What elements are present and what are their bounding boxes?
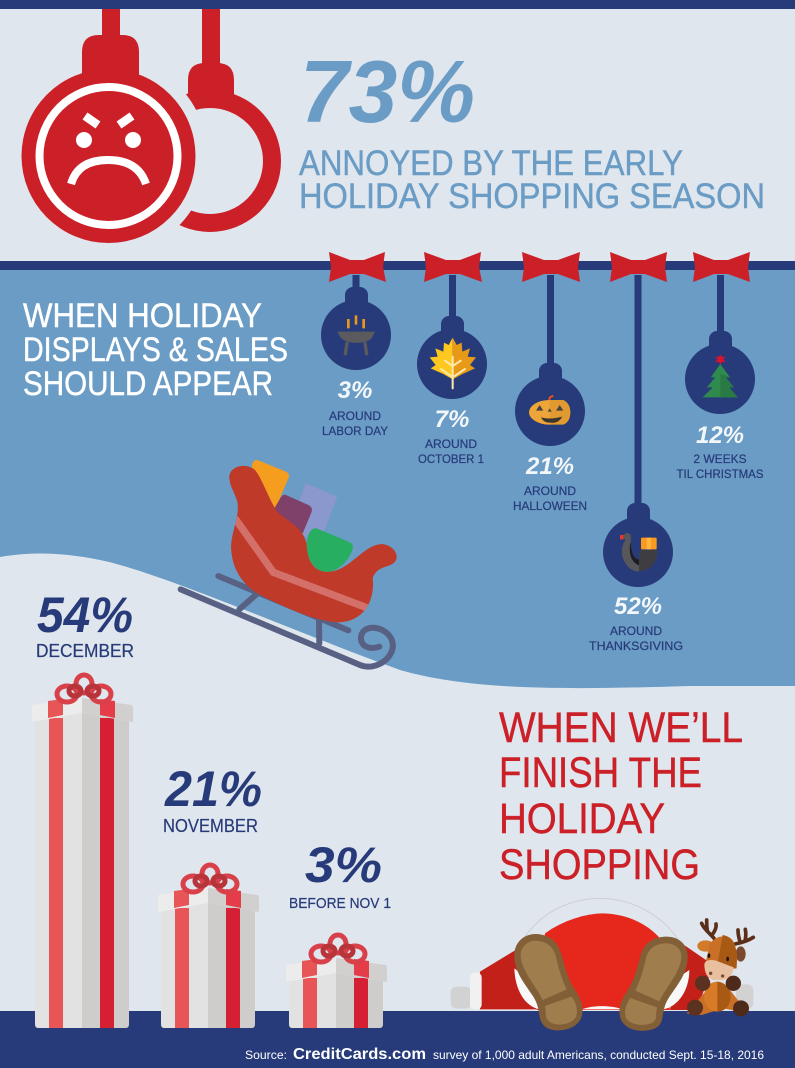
stat: thanksgiving: 52% [614, 593, 662, 620]
section heading: when we'll finish: SHOPPING [499, 841, 700, 889]
section heading: when we'll finish: HOLIDAY [499, 795, 665, 843]
top bar [0, 0, 795, 9]
stat: thanksgiving [589, 593, 683, 653]
gift bar: before nov 1 [286, 935, 387, 1028]
stat: christmas: TIL CHRISTMAS [676, 467, 764, 481]
icon: sleigh [181, 460, 397, 667]
stat: halloween [513, 453, 587, 513]
section heading: when displays should appear: SHOULD APPEAR [23, 365, 273, 403]
stat: december: 54% [37, 587, 133, 643]
ornament: christmas [685, 275, 755, 414]
bottom bar [0, 1011, 795, 1068]
headline text: ANNOYED BY THE EARLY [299, 144, 683, 183]
section heading: when displays should appear: DISPLAYS & SALES [23, 331, 288, 369]
section heading: when we'll finish: FINISH THE [499, 749, 702, 797]
icon: left boot [514, 934, 583, 1030]
stat: labor day: AROUND [329, 409, 381, 423]
stat: labor day [322, 377, 388, 438]
icon: christmas tree [703, 354, 738, 397]
source footer: survey of 1,000 adult Americans, conducted Sept. 15-18, 2016 [433, 1048, 764, 1062]
ornament: thanksgiving [603, 275, 673, 587]
icon: autumn leaf [430, 338, 476, 388]
source footer: Source: [245, 1048, 287, 1062]
gift bar: december [32, 675, 133, 1028]
illustration: santa lying down [451, 898, 753, 1031]
section heading: when displays should appear [23, 297, 288, 403]
headline text: HOLIDAY SHOPPING SEASON [299, 177, 765, 216]
ribbon bows [329, 252, 750, 282]
ornament: labor day [321, 275, 391, 370]
stat: halloween: AROUND [524, 484, 576, 498]
stat: christmas: 12% [696, 422, 744, 449]
source footer [245, 1046, 764, 1063]
stat: october 1: AROUND [425, 437, 477, 451]
stat: october 1: OCTOBER 1 [418, 452, 484, 466]
section heading: when we'll finish: WHEN WE’LL [499, 704, 743, 752]
stat: before nov 1 [289, 837, 391, 912]
stat: thanksgiving: THANKSGIVING [589, 639, 683, 653]
icon: red ring ornament [10, 9, 272, 255]
stat: october 1 [418, 406, 484, 466]
divider rail [0, 261, 795, 270]
stat: christmas: 2 WEEKS [693, 452, 747, 466]
headline statistic: 73% [300, 42, 475, 141]
stat: halloween: HALLOWEEN [513, 499, 587, 513]
stat: christmas [676, 422, 764, 481]
stat: halloween: 21% [525, 453, 574, 480]
stat: thanksgiving: AROUND [610, 624, 662, 638]
blue wave section background [0, 270, 795, 688]
stat: labor day: LABOR DAY [322, 424, 388, 438]
section heading: when we'll finish [499, 704, 743, 889]
icon: right boot [619, 937, 688, 1031]
stat: november: NOVEMBER [163, 816, 258, 836]
stat: november: 21% [164, 761, 262, 817]
source footer: CreditCards.com [293, 1046, 426, 1063]
ornament: halloween [515, 275, 585, 446]
icon: reindeer plush [687, 920, 753, 1016]
stat: before nov 1: 3% [305, 837, 382, 893]
stat: october 1: 7% [435, 406, 469, 433]
stat: before nov 1: BEFORE NOV 1 [289, 895, 391, 912]
stat: labor day: 3% [338, 377, 372, 404]
section heading: when displays should appear: WHEN HOLIDAY [23, 297, 262, 335]
icon: grill [337, 315, 375, 354]
icon: angry face ornament [22, 9, 196, 243]
headline text [299, 144, 765, 216]
gift bar: november [158, 865, 259, 1028]
ornament: october 1 [417, 275, 487, 399]
icon: turkey [620, 533, 657, 571]
icon: pumpkin [529, 396, 570, 425]
stat: december: DECEMBER [36, 641, 134, 661]
